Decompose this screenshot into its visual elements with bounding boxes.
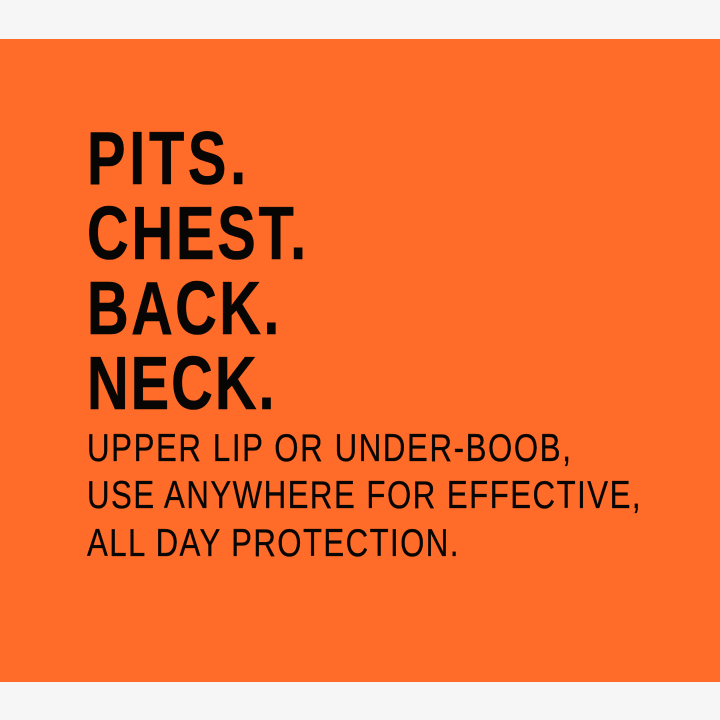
text block: usage description: USE ANYWHERE FOR EFFECTIVE, (87, 474, 642, 517)
text block: usage description (86, 426, 642, 564)
heading: body zones: CHEST. (86, 190, 309, 274)
heading: body zones: PITS. (86, 116, 249, 200)
text block: usage description: UPPER LIP OR UNDER-BOOB, (87, 426, 573, 470)
heading: body zones: BACK. (86, 266, 281, 350)
heading: body zones (86, 116, 309, 424)
heading: body zones: NECK. (86, 340, 276, 424)
text block: usage description: ALL DAY PROTECTION. (87, 522, 460, 564)
